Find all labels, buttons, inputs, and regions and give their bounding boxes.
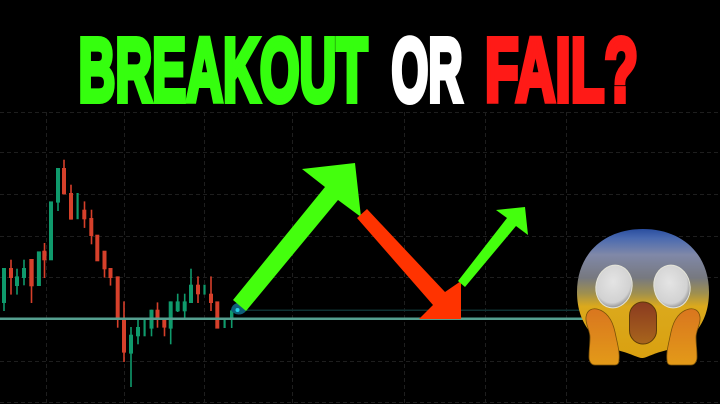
- arrow: large green up: [233, 163, 361, 311]
- candlestick chart: [2, 160, 233, 387]
- bullish candles: [2, 168, 233, 387]
- chart grid: [0, 112, 720, 404]
- arrow: red down: [357, 209, 461, 319]
- support line (dim): [246, 310, 580, 311]
- emoji left hand: [586, 309, 619, 365]
- support line: [0, 318, 590, 320]
- arrow: small green up: [458, 207, 528, 287]
- title word: BREAKOUT: BREAKOUT: [78, 21, 368, 121]
- title: [78, 21, 638, 121]
- icon: screaming face emoji: [577, 229, 709, 365]
- emoji right hand: [667, 309, 700, 365]
- title word: OR: OR: [392, 21, 462, 121]
- emoji mouth: [630, 302, 656, 344]
- emoji left eye: [592, 262, 636, 311]
- start marker: [231, 303, 246, 315]
- emoji right eye: [650, 262, 694, 311]
- emoji head: [577, 229, 709, 358]
- bearish candles: [9, 160, 219, 362]
